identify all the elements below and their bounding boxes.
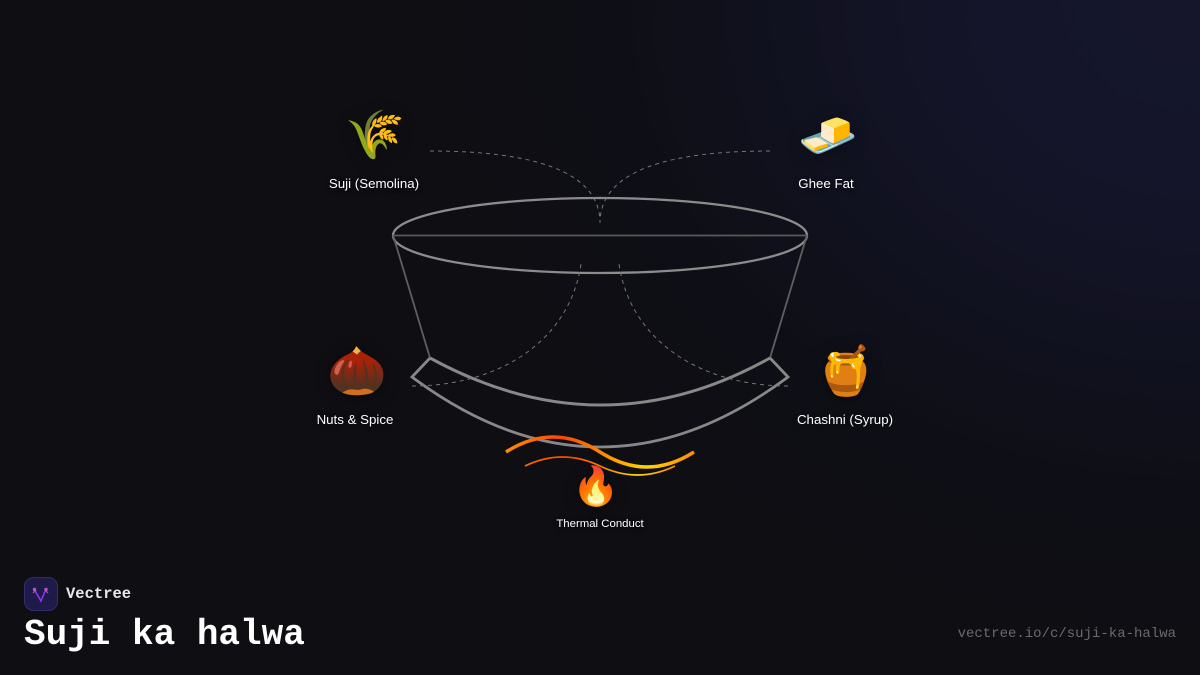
heat wave: outer xyxy=(506,437,694,467)
connector: chashni to vessel xyxy=(619,264,788,386)
source url: vectree.io/c/suji-ka-halwa xyxy=(958,626,1176,642)
brand logo xyxy=(24,577,58,611)
ingredient: nuts and spice: 🌰 xyxy=(327,342,387,399)
connector: ghee to vessel xyxy=(600,151,770,223)
heat wave: inner xyxy=(525,457,675,475)
kadhai vessel xyxy=(393,198,807,447)
ingredient: suji: Suji (Semolina) xyxy=(329,176,419,191)
ingredient: ghee: Ghee Fat xyxy=(798,176,854,191)
connector: suji to vessel xyxy=(430,151,600,223)
ingredient: nuts and spice: Nuts & Spice xyxy=(317,412,393,427)
ingredient: suji xyxy=(329,106,419,191)
ingredient: ghee xyxy=(798,107,858,191)
ingredient: chashni: 🍯 xyxy=(816,342,876,399)
ingredient: chashni: Chashni (Syrup) xyxy=(797,412,893,427)
heat source: thermal conduct xyxy=(556,463,644,530)
ingredient: chashni xyxy=(797,342,893,427)
brand name: Vectree xyxy=(66,585,131,603)
heat source: thermal conduct: 🔥 xyxy=(572,465,620,509)
ingredient: suji: 🌾 xyxy=(345,106,405,163)
ingredient: nuts and spice xyxy=(317,342,393,427)
ingredient: ghee: 🧈 xyxy=(798,107,858,164)
connector: nuts to vessel xyxy=(412,264,581,386)
title: Suji ka halwa xyxy=(24,614,305,655)
heat source: thermal conduct: Thermal Conduct xyxy=(556,518,644,530)
